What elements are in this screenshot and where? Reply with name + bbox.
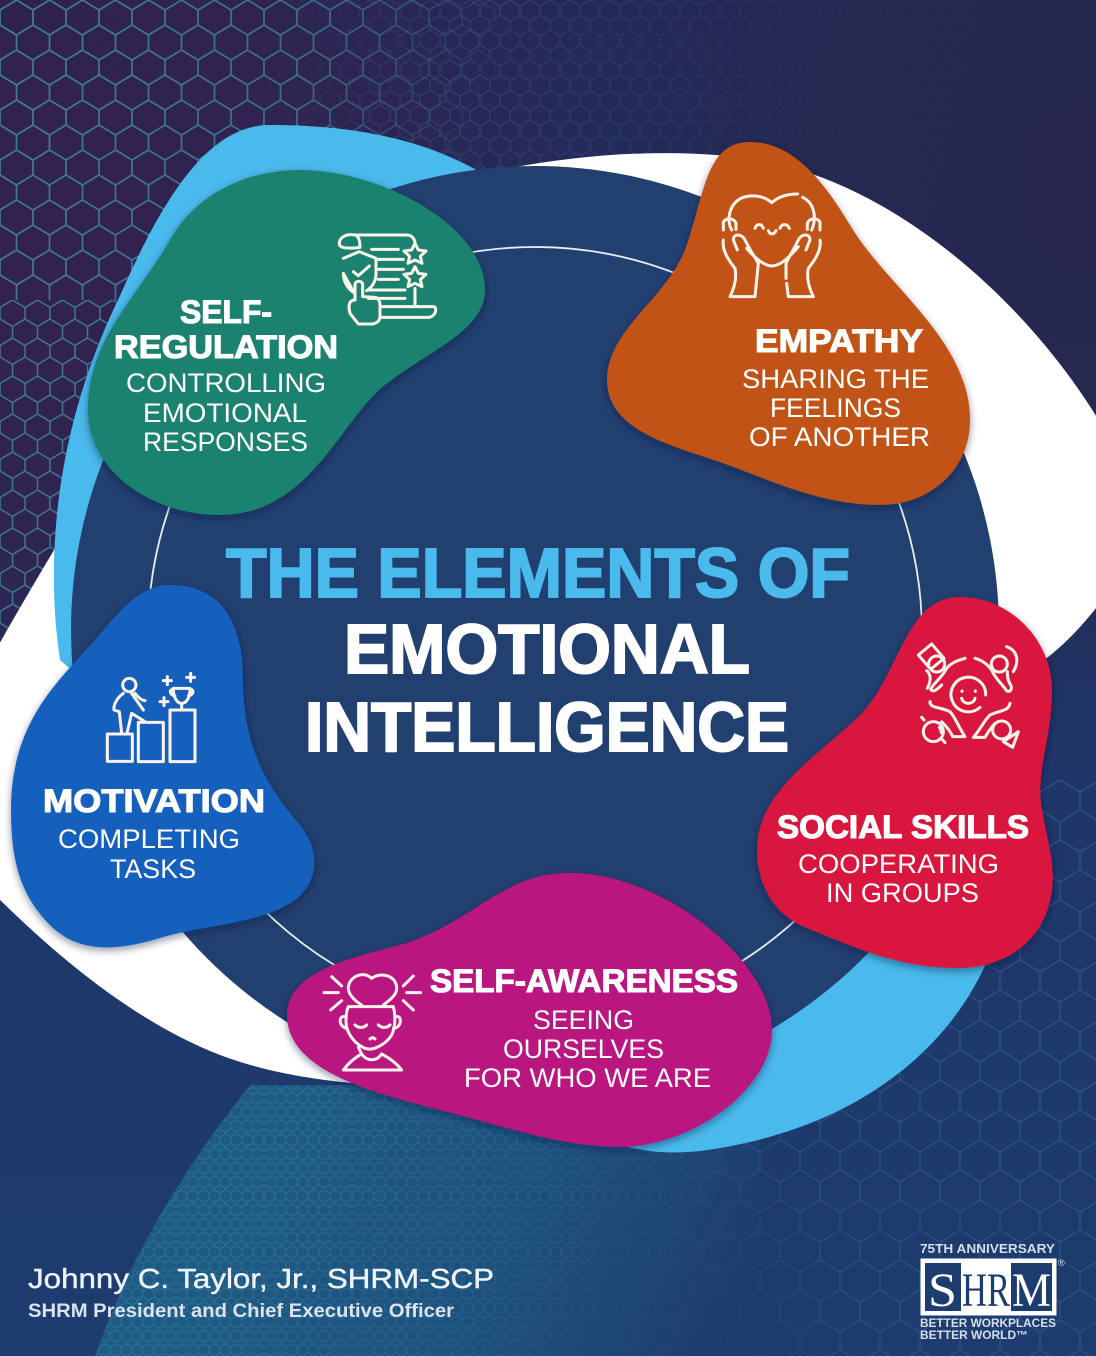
panel: self-awareness [287, 873, 772, 1147]
description: social skills [798, 849, 999, 908]
SHRM logo: BETTER WORLD™ [920, 1330, 1028, 1342]
description: motivation: TASKS [110, 854, 196, 884]
SHRM logo: M [1012, 1264, 1051, 1317]
description: self-regulation: RESPONSES [143, 427, 308, 457]
panel: social skills [757, 597, 1053, 968]
title: EMOTIONAL [344, 610, 750, 688]
white backing shape [0, 153, 1096, 1086]
heading: empathy: EMPATHY [755, 323, 923, 359]
description: self-regulation: CONTROLLING [126, 368, 326, 398]
description: self-regulation [126, 368, 326, 457]
panel: self-regulation [88, 170, 485, 515]
heading: social skills: SOCIAL SKILLS [777, 809, 1029, 845]
heading: motivation: MOTIVATION [43, 783, 265, 819]
description: empathy [742, 364, 930, 452]
description: social skills: COOPERATING [798, 849, 999, 879]
heading: self-regulation: REGULATION [114, 329, 338, 365]
description: self-regulation: EMOTIONAL [143, 398, 307, 428]
SHRM logo: ® [1058, 1258, 1065, 1268]
SHRM logo: S [928, 1264, 957, 1317]
light blue backing shape [54, 125, 1005, 1152]
attribution: Johnny C. Taylor, Jr., SHRM-SCP [28, 1263, 494, 1294]
attribution [28, 1263, 494, 1322]
icon: head with heart [324, 975, 421, 1070]
attribution: SHRM President and Chief Executive Officer [28, 1301, 455, 1322]
thin ring [148, 247, 922, 1021]
description: self-awareness: FOR WHO WE ARE [464, 1063, 711, 1093]
description: empathy: SHARING THE [742, 364, 929, 394]
description: social skills: IN GROUPS [826, 878, 979, 908]
SHRM logo: BETTER WORKPLACES [920, 1318, 1056, 1330]
central navy circle [71, 166, 999, 1094]
description: empathy: FEELINGS [770, 393, 901, 423]
description: motivation [58, 824, 240, 884]
description: empathy: OF ANOTHER [749, 422, 930, 452]
SHRM logo: 75TH ANNIVERSARY [920, 1242, 1056, 1256]
SHRM logo [920, 1242, 1065, 1342]
SHRM logo: HR [962, 1264, 1010, 1317]
panel: motivation [11, 585, 314, 947]
icon: group of people [918, 644, 1018, 747]
heading: self-regulation [114, 294, 338, 365]
icon: scroll, shield and stars [339, 235, 436, 324]
description: self-awareness [464, 1005, 711, 1093]
title: THE ELEMENTS OF [226, 534, 850, 612]
description: self-awareness: SEEING [533, 1005, 634, 1035]
icon: hands holding heart [723, 194, 820, 297]
title: INTELLIGENCE [305, 688, 789, 766]
heading: self-regulation: SELF- [180, 294, 272, 330]
title [226, 534, 850, 766]
description: motivation: COMPLETING [58, 824, 240, 854]
panel: empathy [607, 142, 970, 505]
description: self-awareness: OURSELVES [503, 1034, 664, 1064]
heading: self-awareness: SELF-AWARENESS [430, 963, 738, 999]
icon: person climbing to trophy [107, 673, 195, 762]
